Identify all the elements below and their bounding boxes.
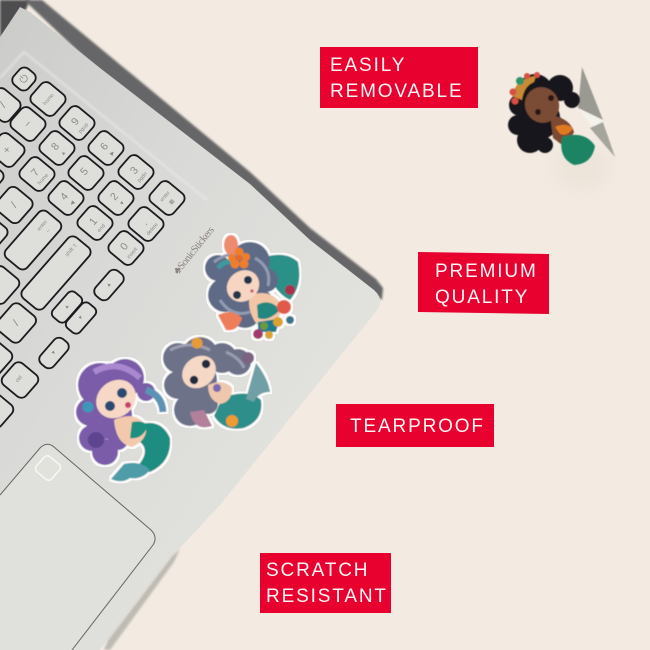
key: 1: end — [96, 223, 107, 234]
star — [82, 402, 94, 412]
key: 2: ▼ — [119, 200, 127, 207]
key: 7 — [17, 154, 57, 194]
key: 6: ▶ — [109, 150, 116, 157]
key: 8: ▲ — [60, 150, 68, 157]
key: page down arrow — [37, 335, 71, 371]
key: 1: 1 — [87, 216, 100, 228]
face — [220, 264, 266, 308]
key: enter: ← — [44, 227, 52, 235]
key: arrow up — [50, 289, 84, 325]
label: easily removable: REMOVABLE — [330, 81, 464, 102]
key: partial left — [0, 263, 22, 307]
star accents — [192, 338, 202, 348]
key: 1 — [75, 203, 115, 243]
key: page up arrow — [92, 267, 126, 303]
key: partial left four — [0, 156, 6, 196]
key: home: home — [42, 93, 56, 107]
laptop front shadow — [104, 549, 180, 650]
key: arrow down: ▼ — [77, 314, 85, 322]
label: easily removable — [320, 47, 478, 108]
laptop — [0, 0, 383, 650]
key: ctrl — [0, 360, 41, 400]
key: 6 — [86, 128, 126, 168]
shell and flower — [224, 235, 238, 255]
sticker: mermaid with orange flower — [205, 235, 299, 339]
key: minus — [8, 104, 48, 144]
peeled corner — [578, 67, 603, 120]
key: delete: . — [139, 218, 150, 228]
key: enter calculator: ▦ — [168, 198, 176, 206]
laptop silver deck — [0, 7, 380, 650]
body — [208, 382, 232, 404]
hair — [205, 242, 278, 328]
touchpad fingerprint button — [34, 454, 62, 482]
laptop dark rear edge — [24, 0, 383, 300]
key: 7: home — [37, 173, 50, 186]
touchpad — [0, 444, 155, 650]
key: partial left five — [0, 212, 10, 252]
key: ctrl: ctrl — [15, 375, 24, 384]
laptop dark corner — [0, 0, 30, 42]
key: power: ⏻ — [17, 72, 32, 86]
key: 3: 3 — [128, 165, 141, 177]
key: partial left two — [0, 337, 15, 377]
label: tearproof: TEARPROOF — [350, 416, 485, 437]
key: page down arrow: ▼ — [50, 349, 58, 357]
label: scratch resistant — [260, 553, 391, 613]
tail — [134, 423, 170, 472]
label: premium quality: PREMIUM — [435, 261, 538, 282]
body — [114, 416, 146, 447]
key: enter: enter — [36, 219, 49, 232]
fin and corals — [218, 312, 242, 330]
label: premium quality: QUALITY — [435, 287, 529, 308]
key: plus: + — [0, 144, 14, 156]
tail — [214, 393, 261, 429]
key: 2 — [96, 178, 136, 218]
key: 5: 5 — [78, 166, 91, 178]
key: alt: / — [11, 318, 22, 328]
keyboard — [0, 65, 187, 430]
key: minus: − — [21, 118, 35, 130]
crown — [512, 76, 536, 100]
key: home — [28, 79, 68, 119]
keyboard recess highlight — [0, 52, 207, 200]
key: enter calculator: enter — [159, 190, 172, 203]
body — [550, 115, 574, 148]
face — [519, 82, 565, 128]
key: power — [10, 65, 38, 93]
key: enter — [2, 208, 64, 272]
face — [176, 349, 222, 395]
key: arrow down — [64, 300, 98, 336]
sticker: mermaid with purple hair — [76, 359, 170, 481]
key: page up arrow: ▲ — [105, 281, 113, 289]
key: 3 — [116, 152, 156, 192]
hair — [163, 337, 251, 426]
face — [88, 372, 144, 426]
key: shift — [19, 234, 93, 312]
key: 4: ◀ — [69, 200, 76, 207]
hair — [76, 359, 155, 465]
body — [249, 293, 282, 326]
key: enter calculator — [147, 178, 187, 218]
key: 9: pgup — [77, 122, 90, 135]
key: delete: delete — [146, 222, 160, 237]
label: scratch resistant: SCRATCH — [266, 560, 369, 581]
key: 0 — [106, 228, 146, 268]
key: 0: 0 — [118, 241, 131, 253]
tail — [262, 255, 299, 300]
key: arrow up: ▲ — [63, 303, 71, 311]
key: 8 — [37, 128, 77, 168]
key: 4: 4 — [58, 191, 71, 203]
sticker: mermaid with grey hair — [163, 337, 270, 429]
peel shadow — [554, 146, 610, 190]
key: 9: 9 — [69, 116, 82, 128]
sticker: mermaid peeling off — [508, 67, 615, 165]
key: 7: 7 — [29, 167, 42, 179]
tail — [561, 135, 595, 165]
key: delete — [126, 204, 166, 244]
key: 9 — [57, 103, 97, 143]
key: pipe — [0, 184, 35, 226]
label: premium quality — [418, 252, 549, 314]
key: shift: shift ⇧ — [64, 242, 79, 258]
key: pipe: / — [9, 200, 20, 210]
key: 8: 8 — [49, 141, 62, 153]
key: plus — [0, 130, 27, 170]
key: 0: insert — [126, 246, 140, 260]
key: alt — [0, 301, 39, 345]
label: easily removable: EASILY — [330, 55, 406, 76]
key: slash — [0, 85, 23, 125]
key: 6: 6 — [98, 141, 111, 153]
key: 5 — [66, 153, 106, 193]
label: scratch resistant: RESISTANT — [266, 586, 388, 607]
brand logo: ♣SonicStickers — [172, 225, 217, 277]
label: tearproof — [336, 404, 494, 447]
key: partial left three — [0, 390, 16, 430]
key: 4 — [46, 178, 86, 218]
key: 2: 2 — [108, 191, 121, 203]
hair — [508, 74, 580, 153]
key: 3: pgdn — [136, 171, 149, 184]
